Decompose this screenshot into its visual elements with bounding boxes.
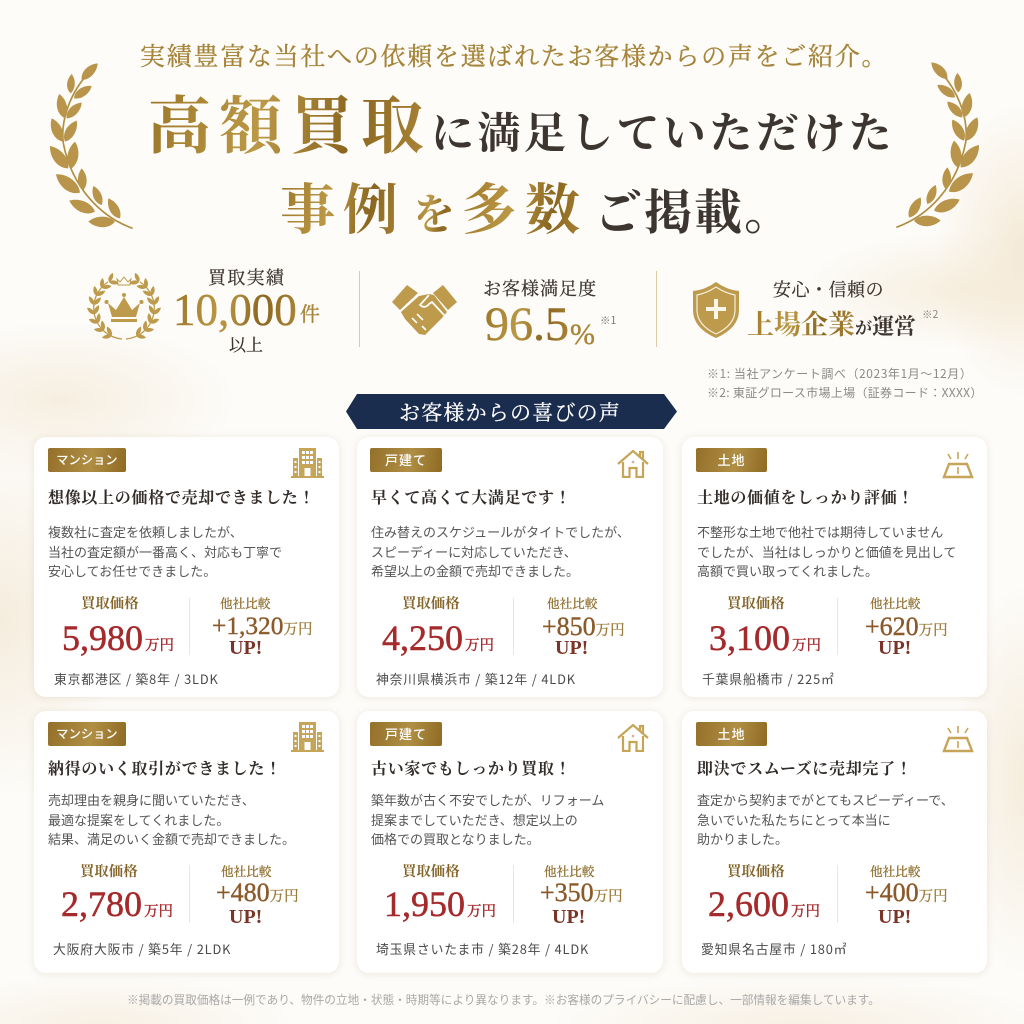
label: 安心・信頼の bbox=[773, 276, 884, 302]
footnotes: ※2: 東証グロース市場上場（証券コード：XXXX） bbox=[707, 384, 983, 401]
icon: land bbox=[942, 452, 974, 478]
footnote mark: ※1 bbox=[600, 313, 616, 328]
testimonial: でしたが、当社はしっかりと価値を見出して bbox=[697, 542, 956, 560]
comparison label: 他社比較 bbox=[544, 861, 594, 880]
banner text: お客様からの喜びの声 bbox=[399, 397, 621, 427]
property details: 愛知県名古屋市 / 180㎡ bbox=[701, 939, 847, 958]
card title: 古い家でもしっかり買取！ bbox=[371, 756, 571, 779]
value: 10,000 bbox=[173, 285, 297, 335]
panel: case 3 bbox=[682, 437, 987, 697]
comparison label: 他社比較 bbox=[870, 861, 920, 880]
testimonial: 急いでいた私たちにとって本当に bbox=[697, 810, 891, 828]
heading: line 1: 高額買取に満足していただけた bbox=[148, 76, 895, 167]
property details: 神奈川県横浜市 / 築12年 / 4LDK bbox=[376, 669, 576, 688]
panel: case 4 bbox=[34, 711, 339, 973]
testimonial bbox=[697, 790, 954, 848]
suffix: 以上 bbox=[229, 331, 263, 356]
testimonial bbox=[48, 522, 282, 580]
testimonial: 売却理由を親身に聞いていただき、 bbox=[48, 790, 255, 809]
icon: left laurel bbox=[50, 63, 133, 230]
badge: 土地 bbox=[717, 724, 746, 743]
badge bbox=[48, 448, 126, 472]
testimonial: 提案までしていただき、想定以上の bbox=[371, 810, 578, 828]
panel: case 2 bbox=[357, 437, 663, 697]
comparison label: 他社比較 bbox=[221, 861, 271, 880]
comparison value: +480万円 bbox=[216, 878, 299, 907]
purchase label: 買取価格 bbox=[727, 592, 785, 613]
badge bbox=[696, 448, 767, 472]
label: 買取実績 bbox=[208, 264, 285, 290]
stat: purchase record bbox=[87, 264, 320, 356]
footnotes: ※1: 当社アンケート調べ（2023年1月〜12月） bbox=[707, 365, 972, 382]
section banner bbox=[346, 394, 677, 429]
comparison value: +850万円 bbox=[542, 612, 625, 641]
subtitle: 実績豊富な当社への依頼を選ばれたお客様からの声をご紹介。 bbox=[140, 37, 888, 73]
icon: handshake bbox=[392, 285, 457, 335]
label: お客様満足度 bbox=[483, 275, 597, 301]
badge: 戸建て bbox=[385, 724, 427, 743]
testimonial: 安心してお任せできました。 bbox=[48, 561, 216, 580]
card title: 想像以上の価格で売却できました！ bbox=[48, 485, 315, 508]
panel: case 1 bbox=[34, 437, 339, 697]
testimonial bbox=[371, 790, 604, 848]
comparison label: 他社比較 bbox=[870, 593, 920, 612]
testimonial: 不整形な土地で他社では期待していません bbox=[697, 522, 943, 541]
up label: UP! bbox=[878, 637, 911, 659]
purchase price: 2,780万円 bbox=[61, 884, 173, 924]
up label: UP! bbox=[229, 906, 262, 928]
comparison value: +400万円 bbox=[865, 878, 948, 907]
testimonial bbox=[697, 522, 956, 580]
card title: 即決でスムーズに売却完了！ bbox=[697, 756, 913, 779]
card title: 早くて高くて大満足です！ bbox=[371, 485, 571, 508]
badge: マンション bbox=[56, 724, 118, 742]
purchase label: 買取価格 bbox=[81, 592, 139, 613]
unit: % bbox=[570, 318, 595, 351]
divider bbox=[358, 271, 360, 347]
comparison label: 他社比較 bbox=[220, 593, 270, 612]
testimonial: 築年数が古く不安でしたが、リフォーム bbox=[371, 790, 604, 809]
value: 96.5 bbox=[485, 298, 569, 351]
unit: 件 bbox=[300, 298, 320, 327]
testimonial: 住み替えのスケジュールがタイトでしたが、 bbox=[371, 522, 630, 541]
property details: 埼玉県さいたま市 / 築28年 / 4LDK bbox=[376, 939, 589, 958]
testimonial: 査定から契約までがとてもスピーディーで、 bbox=[697, 790, 954, 809]
stat: listed company bbox=[693, 276, 938, 342]
card title: 土地の価値をしっかり評価！ bbox=[697, 485, 914, 508]
icon: crown with laurel bbox=[87, 273, 161, 340]
purchase price: 4,250万円 bbox=[382, 618, 494, 658]
icon: right laurel bbox=[896, 62, 979, 228]
purchase label: 買取価格 bbox=[402, 860, 460, 881]
purchase label: 買取価格 bbox=[80, 860, 138, 881]
badge: 戸建て bbox=[385, 450, 427, 469]
testimonial: 価格での買取となりました。 bbox=[371, 829, 540, 848]
purchase price: 2,600万円 bbox=[708, 884, 820, 924]
icon: house bbox=[617, 724, 649, 752]
heading: line 2: 事例を多数ご掲載。 bbox=[280, 166, 794, 245]
disclaimer: ※掲載の買取価格は一例であり、物件の立地・状態・時期等により異なります。※お客様のプライバシーに配慮し、一部情報を編集しています。 bbox=[127, 991, 880, 1008]
purchase price: 5,980万円 bbox=[62, 618, 174, 658]
comparison value: +1,320万円 bbox=[212, 612, 312, 640]
panel: case 5 bbox=[357, 711, 663, 973]
purchase label: 買取価格 bbox=[727, 860, 785, 881]
card title: 納得のいく取引ができました！ bbox=[48, 756, 282, 779]
comparison label: 他社比較 bbox=[547, 593, 597, 612]
testimonial: 助かりました。 bbox=[697, 829, 788, 848]
testimonial: 最適な提案をしてくれました。 bbox=[48, 810, 229, 828]
badge bbox=[370, 448, 442, 472]
badge bbox=[696, 722, 767, 746]
up label: UP! bbox=[555, 637, 588, 659]
icon: land bbox=[942, 726, 974, 752]
badge bbox=[370, 722, 442, 746]
testimonial: 希望以上の金額で売却できました。 bbox=[371, 561, 579, 580]
property details: 大阪府大阪市 / 築5年 / 2LDK bbox=[53, 939, 231, 958]
badge: マンション bbox=[56, 450, 118, 468]
testimonial: スピーディーに対応していただき、 bbox=[371, 542, 577, 560]
property details: 千葉県船橋市 / 225㎡ bbox=[702, 669, 835, 688]
property details: 東京都港区 / 築8年 / 3LDK bbox=[54, 669, 219, 688]
purchase label: 買取価格 bbox=[402, 592, 460, 613]
testimonial bbox=[48, 790, 295, 848]
value: 上場企業が運営 bbox=[747, 303, 916, 342]
icon: shield bbox=[693, 282, 739, 338]
divider bbox=[656, 271, 657, 347]
comparison value: +350万円 bbox=[540, 878, 623, 907]
purchase price: 3,100万円 bbox=[709, 618, 821, 658]
badge bbox=[48, 722, 126, 746]
testimonial bbox=[371, 522, 630, 580]
icon: building bbox=[291, 722, 324, 752]
testimonial: 高額で買い取ってくれました。 bbox=[697, 561, 878, 580]
footnotes bbox=[707, 365, 983, 401]
testimonial: 当社の査定額が一番高く、対応も丁寧で bbox=[48, 542, 282, 560]
icon: building bbox=[291, 448, 324, 478]
testimonial: 結果、満足のいく金額で売却できました。 bbox=[48, 829, 295, 848]
badge: 土地 bbox=[717, 450, 746, 469]
stat: satisfaction bbox=[392, 275, 616, 351]
up label: UP! bbox=[552, 906, 585, 928]
footnote mark: ※2 bbox=[922, 307, 938, 322]
purchase price: 1,950万円 bbox=[384, 884, 496, 924]
up label: UP! bbox=[229, 637, 262, 659]
up label: UP! bbox=[878, 906, 911, 928]
testimonial: 複数社に査定を依頼しましたが、 bbox=[48, 522, 243, 541]
panel: case 6 bbox=[682, 711, 987, 973]
comparison value: +620万円 bbox=[865, 612, 948, 641]
icon: house bbox=[617, 450, 649, 478]
